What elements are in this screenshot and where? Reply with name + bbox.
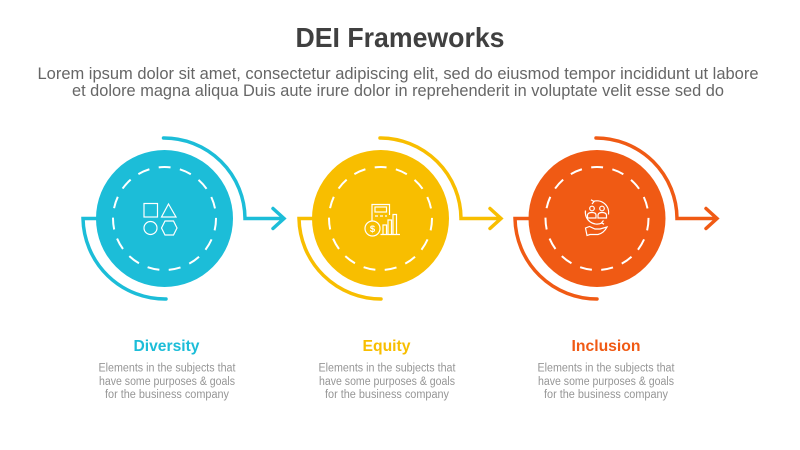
label block: Diversity: Elements in the subjects that (98, 362, 236, 374)
label block: Inclusion: Elements in the subjects that (538, 362, 675, 374)
circle: Diversity (96, 150, 233, 287)
label block: Inclusion (538, 338, 675, 401)
dashed ring: Diversity (113, 167, 216, 270)
icon: people in a hand (585, 200, 609, 236)
label block: Inclusion: Inclusion (572, 338, 640, 355)
icon: calculator and chart (365, 204, 400, 236)
dashed ring: Equity (329, 167, 432, 270)
outer arc and arrow: Equity (299, 138, 501, 299)
icon: shapes (144, 204, 177, 235)
label block: Diversity (98, 338, 236, 401)
label block: Equity: Equity (362, 338, 411, 355)
dashed ring: Inclusion (546, 167, 648, 270)
outer arc and arrow: Diversity (83, 138, 284, 299)
outer arc and arrow: Inclusion (515, 138, 717, 299)
label block: Diversity: for the business company (105, 389, 229, 401)
title: DEI Frameworks (296, 22, 504, 53)
intro paragraph: et dolore magna aliqua Duis aute irure dolor in reprehenderit in voluptate velit esse sed do (72, 82, 724, 100)
label block: Diversity: have some purposes & goals (99, 376, 235, 388)
label block: Inclusion: have some purposes & goals (538, 376, 674, 388)
step: Diversity (83, 138, 284, 299)
intro paragraph (38, 65, 758, 100)
step: Equity (299, 138, 501, 299)
icon: calculator and chart: $ (370, 224, 376, 235)
step: Inclusion (515, 138, 717, 299)
circle: Inclusion (528, 150, 666, 287)
label block: Equity: have some purposes & goals (319, 376, 455, 388)
label block: Equity (318, 338, 456, 401)
label block: Inclusion: for the business company (544, 389, 668, 401)
intro paragraph: Lorem ipsum dolor sit amet, consectetur adipiscing elit, sed do eiusmod tempor incididunt ut labore (38, 65, 758, 83)
circle: Equity (312, 150, 449, 287)
label block: Diversity: Diversity (134, 338, 200, 355)
label block: Equity: Elements in the subjects that (318, 362, 456, 374)
label block: Equity: for the business company (325, 389, 449, 401)
